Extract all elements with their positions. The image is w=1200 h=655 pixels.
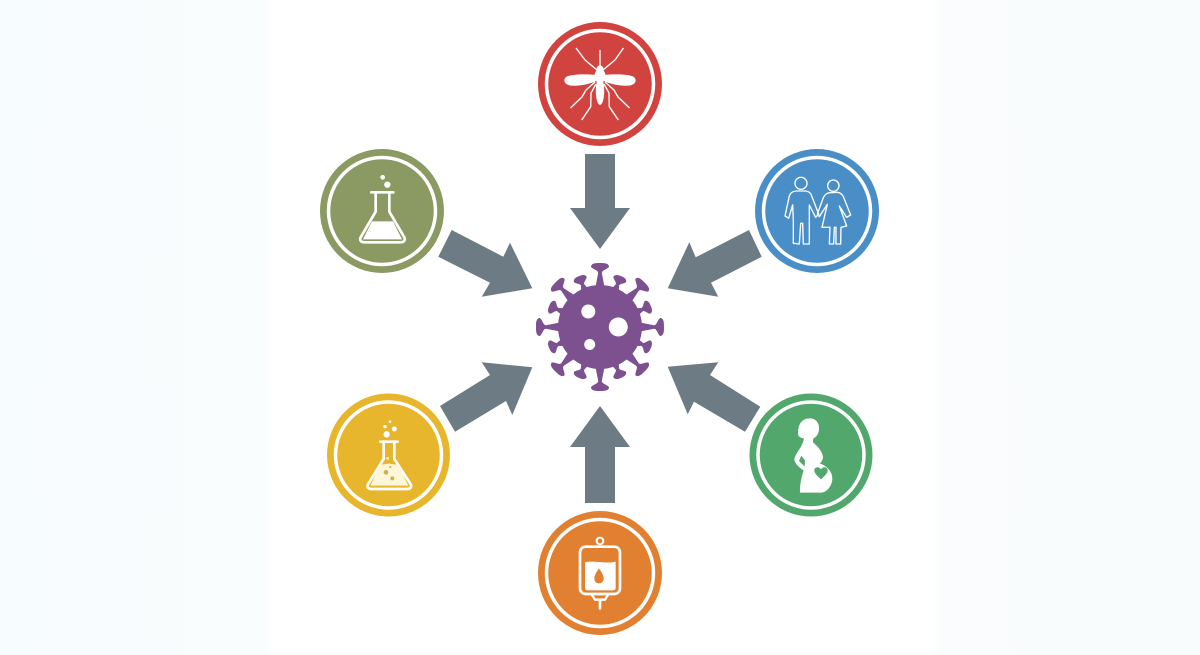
icon: bubbling flask badge (yellow) [327, 394, 450, 516]
icon: mosquito badge [538, 22, 662, 146]
icon: central virus [536, 263, 664, 391]
arrow: upper right to centre [668, 230, 762, 297]
icon: pregnant woman badge [750, 394, 872, 516]
arrow: top to centre [570, 154, 630, 249]
icon: blood transfusion bag badge [538, 511, 662, 635]
arrow: lower left to centre [440, 362, 532, 432]
arrow: lower right to centre [668, 362, 760, 432]
icon: laboratory flask badge (olive) [320, 149, 444, 273]
icon: couple badge [755, 149, 879, 273]
arrow: bottom to centre [570, 406, 630, 503]
arrow: upper left to centre [438, 230, 532, 297]
